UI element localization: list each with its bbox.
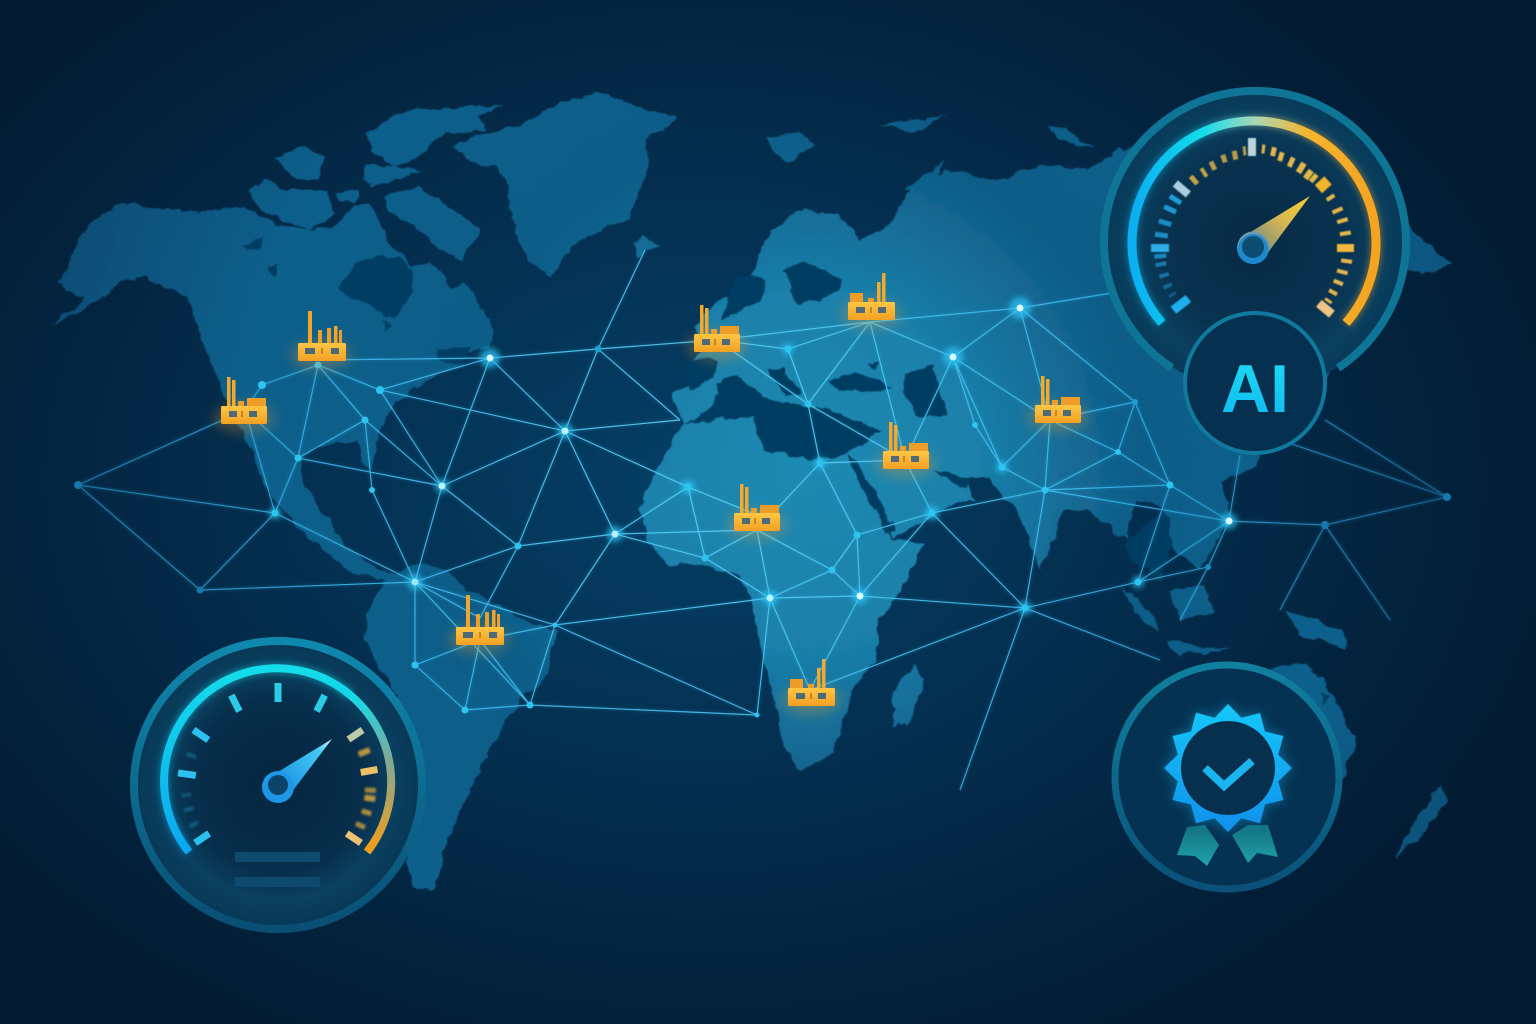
AI label: AI	[1221, 351, 1289, 427]
continent: South America	[365, 562, 558, 890]
Southeast Asia islands	[1120, 585, 1348, 655]
continent: North America	[50, 202, 492, 586]
badge seal body	[1164, 704, 1292, 832]
network connection lines	[78, 250, 1447, 790]
factory: Southern Africa	[781, 659, 841, 715]
badge ribbons	[1177, 825, 1278, 866]
Iceland and northern islands	[633, 115, 1095, 257]
gauge hub	[262, 771, 294, 803]
factory: North America north	[291, 311, 351, 370]
world map	[50, 93, 1452, 890]
AI badge	[1185, 313, 1325, 453]
continent: Greenland	[455, 93, 678, 277]
gauge: bottom left speedometer	[134, 641, 422, 929]
quality certification badge	[1115, 665, 1339, 889]
arctic islands	[250, 105, 503, 260]
seas and inland waters	[242, 237, 1330, 705]
network node glows	[269, 297, 1237, 615]
factory: North America west	[214, 377, 274, 433]
network nodes	[74, 304, 1451, 718]
Madagascar	[893, 665, 925, 728]
continent: Australia	[1200, 665, 1356, 850]
gauge coloured arc	[164, 668, 391, 852]
badge check mark	[1205, 761, 1252, 786]
factory: Central Asia	[1028, 376, 1088, 432]
gauge ticks	[1151, 138, 1354, 318]
factory: Middle East	[876, 422, 936, 478]
factory: West Africa	[727, 484, 787, 540]
gauge needle	[268, 739, 332, 797]
continent: Eurasia	[672, 130, 1452, 570]
badge seal glow	[1164, 704, 1292, 832]
factory: Western Europe	[687, 305, 747, 361]
gauge: top right speedometer	[1104, 91, 1406, 392]
gauge coloured arc	[1132, 121, 1376, 323]
gauge readout bars	[235, 852, 320, 887]
factory: Eastern Europe	[841, 273, 901, 329]
gauge outer ring	[1104, 91, 1406, 368]
gauge ticks	[177, 683, 378, 846]
New Zealand	[1395, 785, 1447, 858]
badge centre disc	[1181, 721, 1275, 815]
continent: Africa	[640, 416, 925, 771]
gauge hub	[1237, 232, 1269, 264]
factory: South America	[449, 595, 509, 654]
factories	[214, 273, 1088, 715]
gauge needle	[1244, 196, 1310, 258]
